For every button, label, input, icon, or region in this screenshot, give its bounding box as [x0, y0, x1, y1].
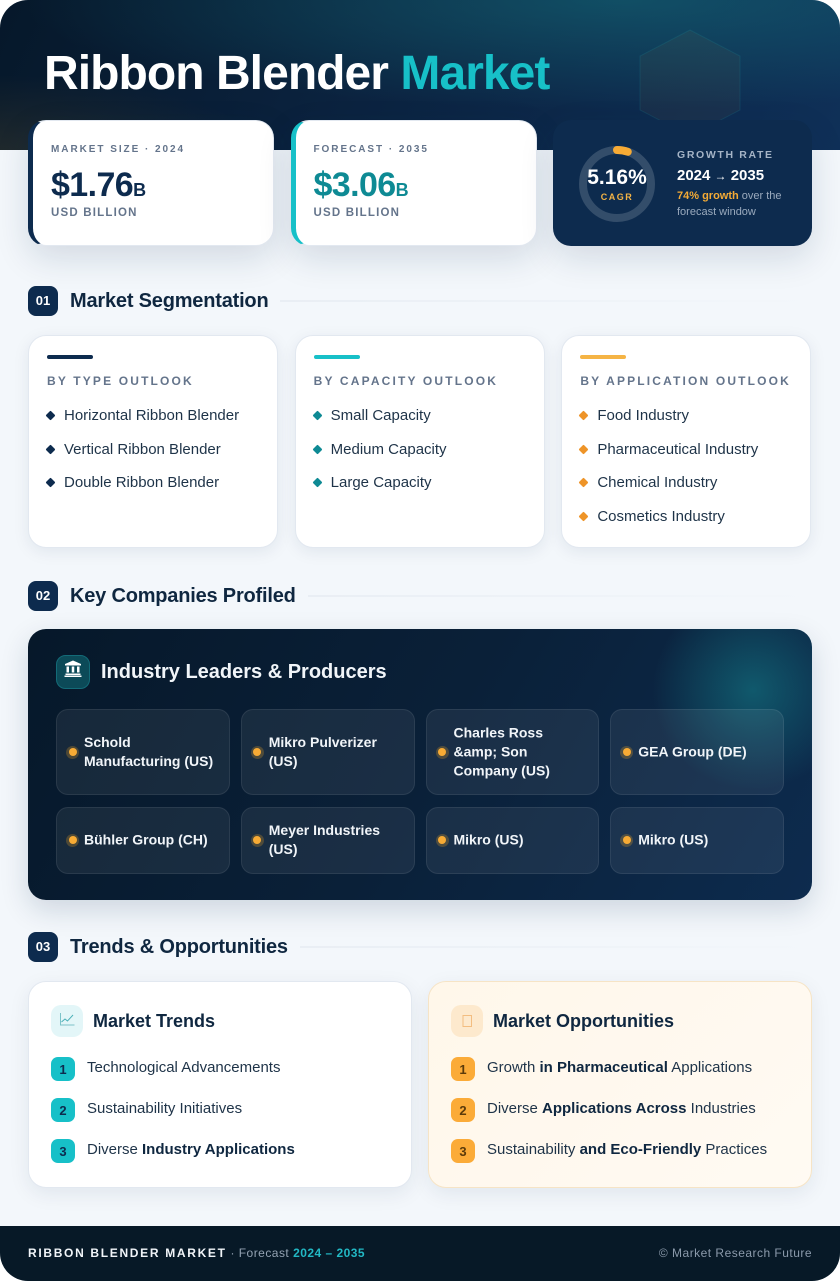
panel heading: BY CAPACITY OUTLOOK: [314, 374, 498, 388]
heading text: Market Segmentation: [70, 290, 268, 312]
trend item: Technological Advancements: [87, 1058, 280, 1076]
company chip: GEA Group (DE): [638, 744, 747, 760]
company chip: Meyer Industries (US): [269, 822, 380, 857]
number tile: [51, 1057, 75, 1081]
section heading: trends: [28, 932, 400, 962]
icon: bank: [56, 655, 90, 689]
panel: industry leaders: [28, 629, 812, 900]
decorative hexagon: [640, 30, 740, 120]
company chip: [610, 807, 784, 874]
year range: 2024 → 2035: [677, 167, 764, 184]
number badge: 01: [36, 293, 50, 308]
value: $1.76B: [51, 166, 146, 204]
company chip: Schold Manufacturing (US): [84, 734, 213, 769]
company chip: [241, 807, 414, 874]
growth description: 74% growth over the: [677, 190, 782, 202]
list item: Small Capacity: [331, 406, 431, 424]
panel heading: Market Opportunities: [493, 1011, 674, 1031]
company chip: [610, 709, 784, 795]
company chip: Mikro (US): [638, 832, 708, 848]
panel heading: BY APPLICATION OUTLOOK: [580, 374, 791, 388]
panel: by type: [28, 335, 278, 548]
panel heading: Market Trends: [93, 1011, 215, 1031]
opportunity item: Diverse Applications Across Industries: [487, 1100, 756, 1116]
header banner: [0, 0, 840, 150]
company chip: Charles Ross &amp; Son Company (US): [454, 724, 550, 778]
number badge: 03: [36, 939, 50, 954]
company chip: [56, 709, 230, 795]
number badge: 02: [36, 588, 50, 603]
stat card: market size: [28, 120, 274, 246]
panel: by capacity: [295, 335, 545, 548]
title: Ribbon Blender Market: [44, 47, 549, 100]
panel: by application: [561, 335, 811, 548]
number tile: 1: [59, 1062, 67, 1077]
number tile: [451, 1098, 475, 1122]
number tile: 1: [459, 1062, 467, 1077]
panel heading: Industry Leaders & Producers: [101, 661, 387, 683]
panel: market opportunities: [428, 981, 812, 1188]
number tile: [451, 1057, 475, 1081]
growth description: [677, 190, 782, 218]
number badge: [28, 932, 58, 962]
company chip: [241, 709, 414, 795]
list item: Cosmetics Industry: [597, 508, 725, 524]
company chip: Bühler Group (CH): [84, 832, 208, 848]
stat card: forecast: [291, 120, 537, 246]
number tile: 3: [59, 1144, 67, 1159]
footer credit: © Market Research Future: [659, 1246, 812, 1260]
cagr label: CAGR: [601, 192, 633, 202]
list item: Pharmaceutical Industry: [597, 440, 758, 458]
list item: Horizontal Ribbon Blender: [64, 406, 239, 424]
company chip: Mikro (US): [454, 832, 524, 848]
heading text: Trends & Opportunities: [70, 936, 288, 958]
number tile: [51, 1098, 75, 1122]
unit: USD BILLION: [314, 207, 400, 219]
cagr value: 5.16%: [587, 166, 647, 189]
section heading: market segmentation: [28, 286, 384, 316]
label: FORECAST · 2035: [314, 144, 429, 154]
trend item: Diverse Industry Applications: [87, 1140, 295, 1158]
number tile: 3: [459, 1144, 467, 1159]
icon: chart: [51, 1005, 83, 1037]
growth label: GROWTH RATE: [677, 149, 774, 161]
company chip: [56, 807, 230, 874]
list item: Chemical Industry: [597, 474, 717, 490]
opportunity item: Sustainability and Eco-Friendly Practices: [487, 1140, 767, 1158]
donut chart: [579, 146, 655, 222]
unit: USD BILLION: [51, 207, 138, 219]
number tile: 2: [459, 1103, 467, 1118]
list item: Large Capacity: [331, 474, 432, 490]
panel: market trends: [28, 981, 412, 1188]
list item: Food Industry: [597, 406, 689, 424]
footer: [0, 1226, 840, 1281]
growth description: forecast window: [677, 206, 756, 218]
heading text: Key Companies Profiled: [70, 585, 296, 607]
list item: Medium Capacity: [331, 440, 447, 458]
stat card: growth rate: [553, 120, 812, 246]
icon: missing glyph box: [451, 1005, 483, 1037]
number badge: [28, 581, 58, 611]
list item: Double Ribbon Blender: [64, 474, 219, 490]
value: $3.06B: [314, 166, 409, 204]
footer title: RIBBON BLENDER MARKET · Forecast 2024 – 2035: [28, 1246, 365, 1260]
number tile: 2: [59, 1103, 67, 1118]
company chip: [426, 709, 599, 795]
number tile: [51, 1139, 75, 1163]
trend item: Sustainability Initiatives: [87, 1100, 242, 1116]
number badge: [28, 286, 58, 316]
number tile: [451, 1139, 475, 1163]
company chip: [426, 807, 599, 874]
company chip: Mikro Pulverizer (US): [269, 734, 377, 769]
list item: Vertical Ribbon Blender: [64, 440, 221, 458]
opportunity item: Growth in Pharmaceutical Applications: [487, 1058, 752, 1076]
label: MARKET SIZE · 2024: [51, 144, 185, 154]
panel heading: BY TYPE OUTLOOK: [47, 374, 194, 388]
section heading: key companies: [28, 581, 406, 611]
